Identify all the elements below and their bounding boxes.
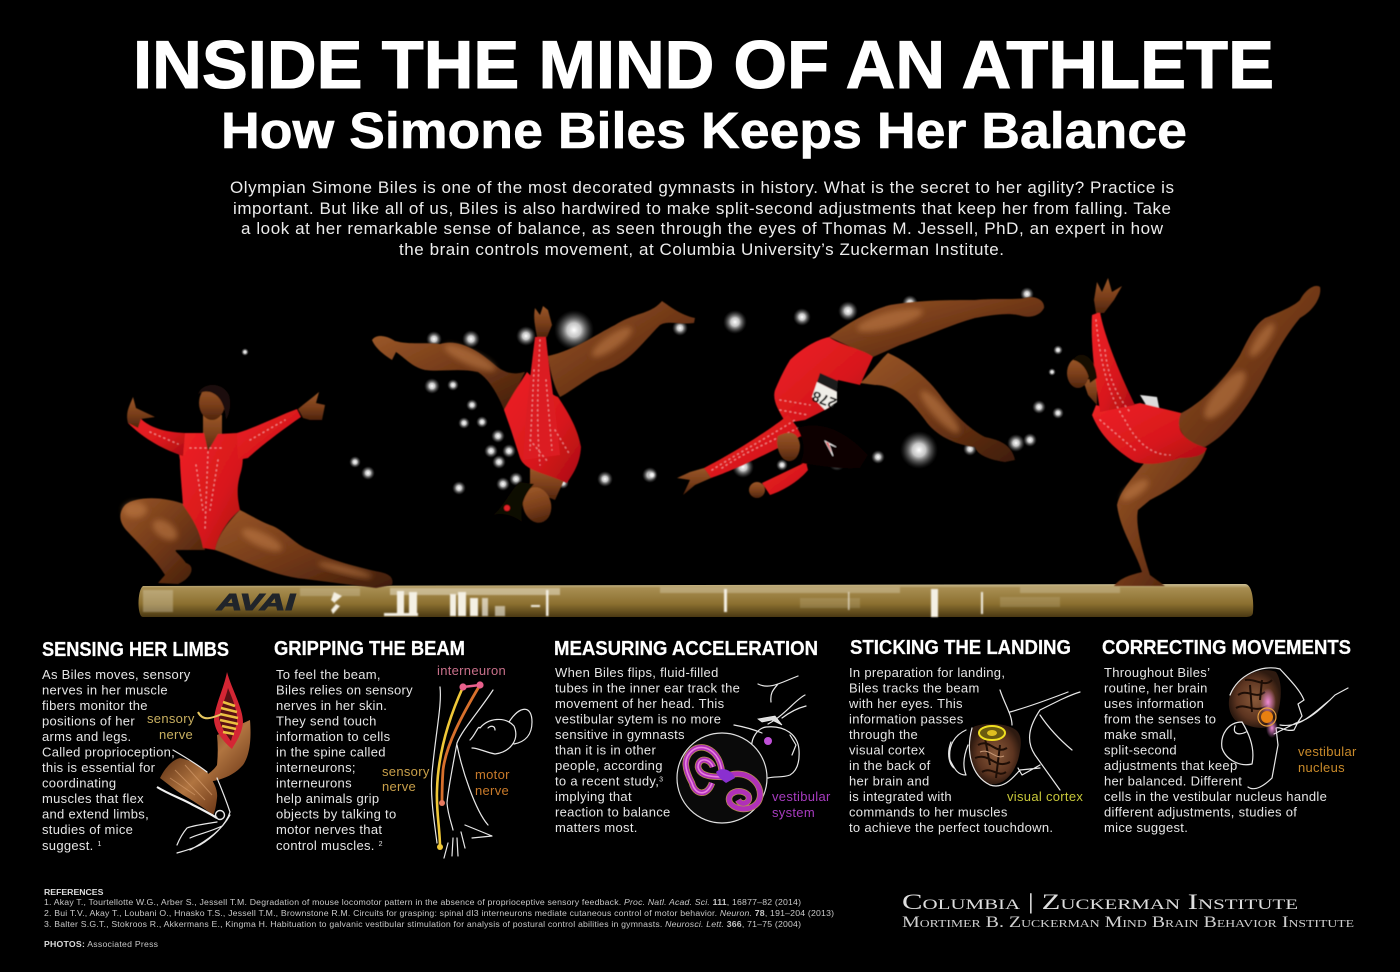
panel: gripping the beam (274, 638, 532, 858)
references: 1. Akay T., Tourtellotte W.G., Arber S., Jessell T.M. Degradation of mouse locomotor pattern in the absence of proprioceptive sensory feedback. Proc. Natl. Acad. Sci. 111, 16877–82 (2014) (44, 897, 801, 907)
body text: suggest. (42, 838, 94, 853)
competitor bib (810, 373, 839, 411)
body text: uses information (1104, 696, 1204, 711)
body text: motor nerves that (276, 822, 382, 837)
body text: to a recent study, (555, 774, 659, 788)
left bent leg (120, 498, 205, 584)
body text: sensitive in gymnasts (555, 727, 685, 742)
label: motor nerve: nerve (475, 783, 509, 798)
body text (276, 667, 413, 853)
label: sensory nerve: sensory (147, 711, 195, 726)
body text: When Biles flips, fluid-filled (555, 665, 719, 680)
bokeh arena lights (241, 287, 1064, 495)
intro text (230, 178, 1174, 259)
body text: this is essential for (42, 760, 156, 775)
illustration: head with visual cortex (949, 690, 1080, 790)
intro text: the brain controls movement, at Columbia University’s Zuckerman Institute. (399, 240, 1004, 259)
body text: arms and legs. (42, 729, 131, 744)
body text: than it is in other (555, 742, 656, 758)
body text: Throughout Biles’ (1104, 665, 1210, 680)
panel: sticking the landing (848, 637, 1083, 835)
heading: GRIPPING THE BEAM (274, 638, 465, 660)
label: sensory nerve: sensory (382, 764, 430, 779)
intro text: Olympian Simone Biles is one of the most decorated gymnasts in history. What is the secret to her agility? Practice is (230, 178, 1174, 197)
beam logo AVAI: AVAI (215, 589, 296, 615)
body text: studies of mice (42, 822, 133, 837)
illustration: muscle spindle and leg (157, 672, 251, 853)
neck (203, 415, 222, 452)
body text: her balanced. Different (1104, 774, 1242, 788)
body text: reaction to balance (555, 804, 671, 820)
body text: information to cells (276, 729, 391, 744)
body text: nerves in her skin. (276, 698, 387, 713)
references: 2. Bui T.V., Akay T., Loubani O., Hnasko T.S., Jessell T.M., Brownstone R.M. Circuits for grasping: spinal dI3 interneurons mediate cutaneous control of motor behavior. Neuron. 78, 191–204 (2013) (44, 908, 834, 918)
references (44, 887, 834, 929)
references: 3. Balter S.G.T., Stokroos R., Akkermans E., Kingma H. Habituation to galvanic vestibular stimulation for analysis of postural control abilities in gymnasts. Neurosci. Lett. 366, 71–75 (2004) (44, 919, 801, 929)
body text (555, 665, 740, 835)
leotard (179, 433, 243, 550)
photo credit: PHOTOS: Associated Press (44, 939, 159, 949)
body text (42, 667, 191, 853)
body text: 1 (97, 841, 102, 848)
body text: As Biles moves, sensory (42, 667, 191, 682)
title: INSIDE THE MIND OF AN ATHLETE (133, 27, 1274, 103)
body text: in the back of (849, 758, 931, 773)
body text: visual cortex (849, 742, 925, 758)
body text: coordinating (42, 776, 116, 790)
label: interneuron: interneuron (437, 663, 506, 678)
head (199, 386, 225, 420)
subtitle: How Simone Biles Keeps Her Balance (221, 102, 1187, 159)
body text: is integrated with (849, 789, 952, 804)
intro text: important. But like all of us, Biles is also hardwired to make split-second adjustments that keep her from falling. Take (233, 199, 1171, 218)
body text: information passes (849, 712, 964, 726)
body text: Biles tracks the beam (849, 680, 980, 696)
body text: mice suggest. (1104, 820, 1188, 835)
body text: In preparation for landing, (849, 665, 1005, 680)
body text: control muscles. (276, 838, 375, 853)
references: REFERENCES (44, 887, 104, 897)
sparkles (150, 420, 285, 530)
body text: commands to her muscles (849, 804, 1008, 820)
body text (848, 665, 1053, 835)
label: sensory nerve (147, 711, 195, 742)
logo: Columbia Zuckerman Institute: Columbia | Zuckerman Institute (902, 889, 1298, 914)
gymnast 3: leap (677, 297, 1044, 498)
body text: split-second (1104, 742, 1177, 758)
panel: correcting movements (1102, 637, 1357, 835)
label: vestibular nucleus (1298, 744, 1357, 775)
gymnast 1: crouch on beam (120, 385, 392, 588)
body text: cells in the vestibular nucleus handle (1104, 789, 1327, 804)
heading: MEASURING ACCELERATION (554, 638, 818, 660)
body text: positions of her (42, 714, 135, 728)
panel: sensing her limbs (42, 639, 251, 853)
sleeves (128, 418, 185, 456)
gymnast 4: scale on beam (1067, 278, 1320, 586)
body text: To feel the beam, (276, 667, 381, 682)
body text: adjustments that keep (1104, 758, 1238, 773)
body text: tubes in the inner ear track the (555, 680, 740, 696)
body text: objects by talking to (276, 806, 396, 822)
body text: from the senses to (1104, 712, 1216, 726)
body text: Called proprioception, (42, 744, 175, 760)
body text: muscles that flex (42, 791, 144, 806)
body text: help animals grip (276, 791, 379, 806)
label: motor nerve: motor (475, 767, 510, 782)
right extended leg (215, 510, 392, 588)
body text: Biles relies on sensory (276, 682, 413, 698)
panel: measuring acceleration (554, 638, 831, 835)
body text: vestibular sytem is no more (555, 712, 721, 726)
competitor bib: 278 (810, 387, 839, 411)
body text: in the spine called (276, 744, 386, 760)
label: vestibular nucleus: vestibular (1298, 744, 1357, 759)
gymnast 2: inverted flip (372, 301, 695, 526)
label: sensory nerve (382, 764, 430, 794)
hands (127, 397, 155, 428)
body text: with her eyes. This (848, 696, 963, 711)
logo: Columbia Zuckerman Institute (902, 889, 1354, 931)
label: sensory nerve: nerve (159, 727, 193, 742)
body text: 3 (659, 776, 663, 784)
heading: STICKING THE LANDING (850, 637, 1071, 659)
body text: to achieve the perfect touchdown. (849, 820, 1053, 835)
body text: through the (849, 727, 918, 742)
body text: her brain and (849, 774, 930, 788)
logo: Columbia Zuckerman Institute: Mortimer B. Zuckerman Mind Brain Behavior Institute (902, 914, 1354, 931)
body text: 2 (379, 841, 383, 848)
label: vestibular system (772, 789, 831, 820)
body text: people, according (555, 758, 663, 773)
label: vestibular system: vestibular (772, 789, 831, 804)
label: sensory nerve: nerve (382, 779, 416, 794)
balance beam (138, 584, 1253, 617)
illustration: inverted head and inner ear (677, 676, 806, 823)
body text: interneurons; (276, 760, 356, 775)
body text: make small, (1104, 727, 1177, 742)
body text: matters most. (555, 820, 638, 835)
intro text: a look at her remarkable sense of balance, as seen through the eyes of Thomas M. Jessell, PhD, an expert in how (241, 219, 1164, 238)
label: motor nerve (475, 767, 510, 798)
body text: fibers monitor the (42, 698, 148, 713)
label: vestibular system: system (772, 805, 815, 820)
heading: CORRECTING MOVEMENTS (1102, 637, 1351, 659)
body text: interneurons (276, 776, 352, 790)
body text: They send touch (276, 714, 377, 728)
body text: nerves in her muscle (42, 682, 168, 698)
body text: implying that (555, 789, 632, 804)
label: visual cortex: visual cortex (1007, 789, 1083, 804)
illustration: head with vestibular nucleus (1222, 668, 1348, 789)
body text: routine, her brain (1104, 680, 1208, 696)
body text: different adjustments, studies of (1104, 804, 1297, 820)
body text (1104, 665, 1327, 835)
body text: and extend limbs, (42, 806, 149, 822)
illustration: arm with nerves (431, 681, 532, 858)
body text: movement of her head. This (555, 696, 725, 711)
heading: SENSING HER LIMBS (42, 639, 229, 661)
label: vestibular nucleus: nucleus (1298, 760, 1345, 775)
